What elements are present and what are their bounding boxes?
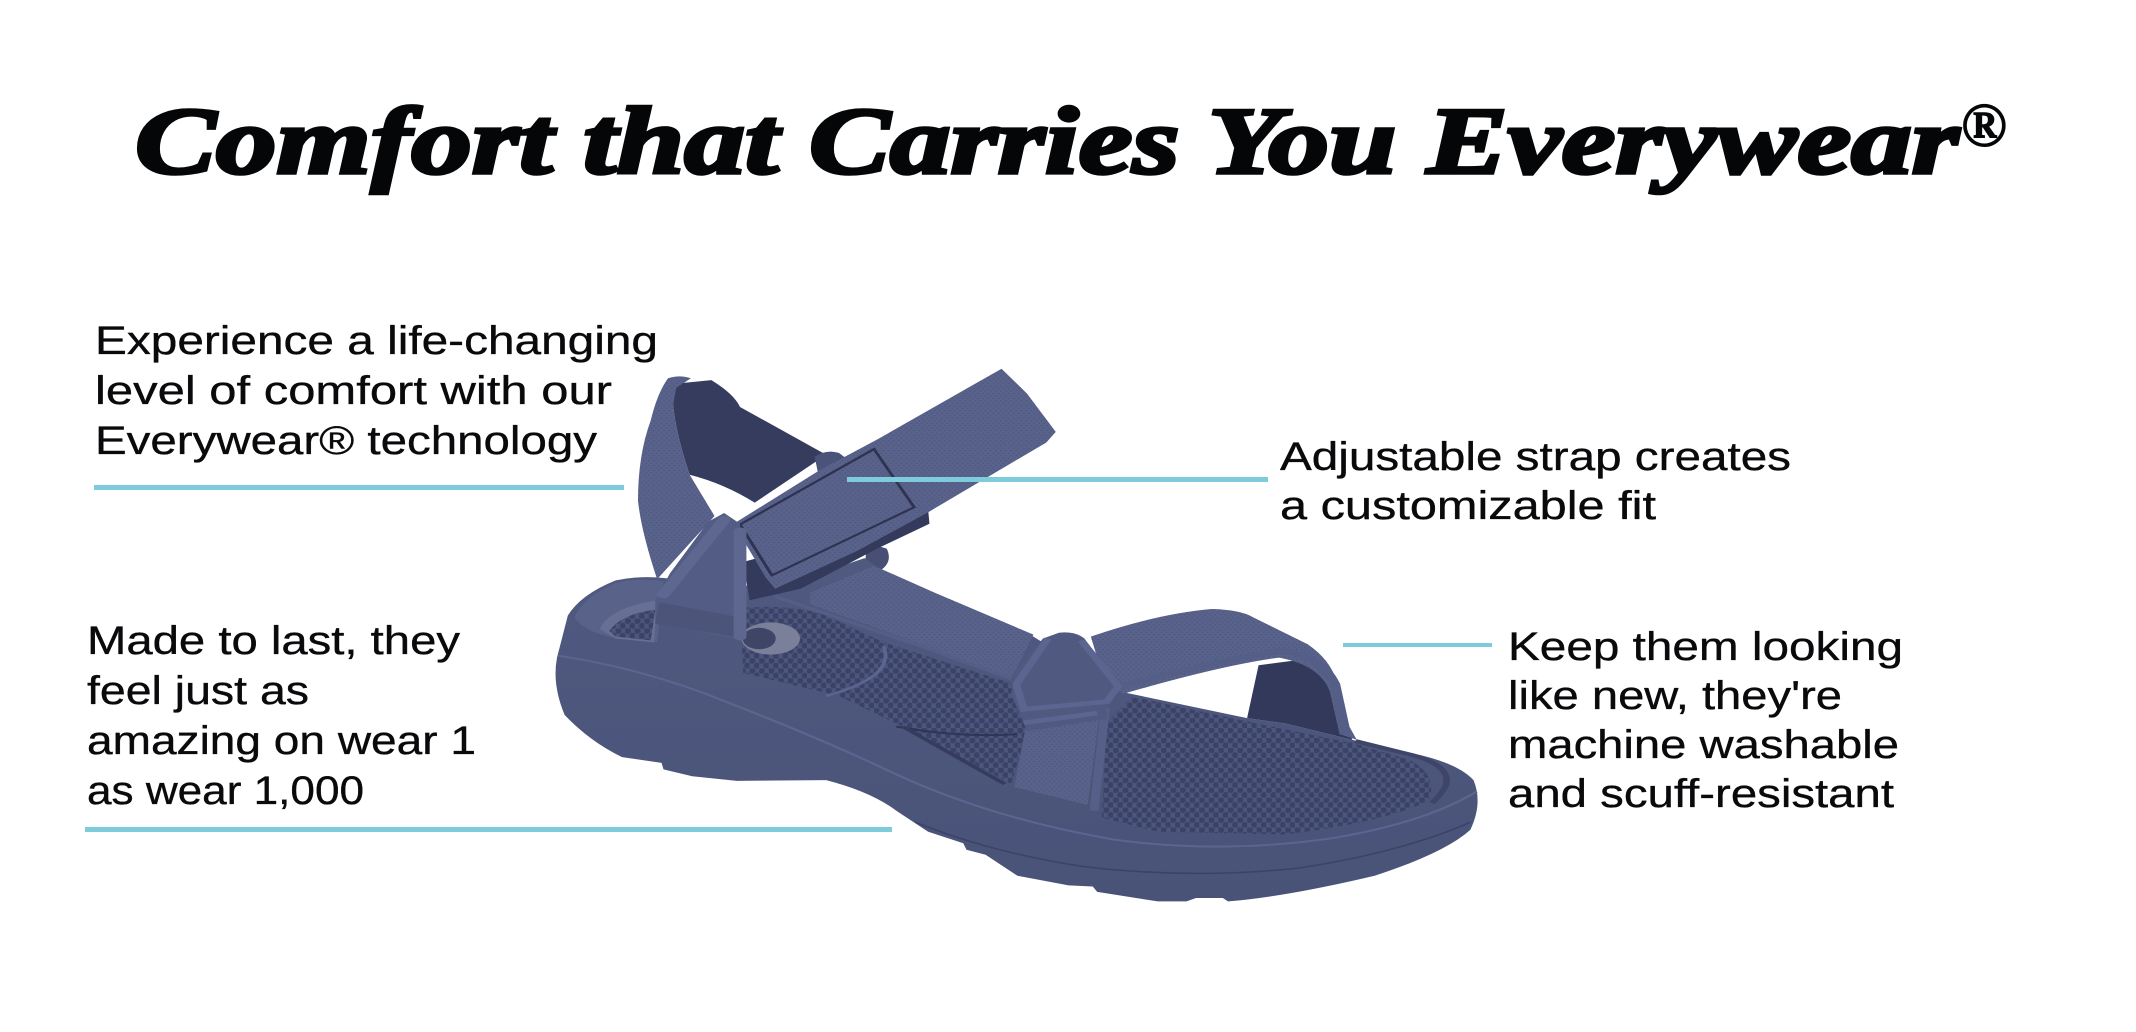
text: made to last: feel just as [87,669,309,713]
text: machine washable: and scuff-resistant [1508,772,1894,816]
text: machine washable: machine washable [1508,723,1899,767]
rear connector base [655,602,734,637]
text: adjustable strap [1280,435,1791,528]
text: Everywear technology: level of comfort with our [95,369,612,413]
front loop behind strap [864,543,889,570]
text: Everywear technology [95,319,658,463]
text: adjustable strap: Adjustable strap creates [1280,435,1791,479]
top strap [734,369,1056,589]
text: Everywear technology: Experience a life-changing [95,319,658,363]
center connector [1011,632,1120,731]
rear strap loop behind buckle [815,452,852,482]
front strap [1091,609,1357,740]
velcro patch [740,449,914,575]
text: Everywear technology: Everywear® technology [95,419,597,463]
callout line: adjustable strap [847,477,1268,482]
rear connector [655,513,740,639]
vertical toe strap edge [1094,707,1106,811]
text: machine washable: like new, they're [1508,674,1842,718]
center connector ridges [1016,639,1118,723]
heel cup [574,580,664,642]
text: machine washable [1508,625,1903,816]
illustration: navy sandal [556,369,1478,901]
velcro underside [743,510,929,600]
rear connector ridges [664,520,740,637]
midsole lower groove [915,822,1470,873]
vertical toe strap [1014,717,1099,805]
heel strap [638,376,715,579]
callout line: washable [1343,643,1492,647]
text: made to last [87,619,476,813]
instep strap [810,566,1033,679]
heel footbed [600,600,657,642]
rear footbed [740,607,1027,784]
sole and midsole body [556,558,1478,901]
text: machine washable: Keep them looking [1508,625,1903,669]
text: adjustable strap: a customizable fit [1280,484,1656,528]
logo disc [741,622,800,655]
arch contour [826,646,886,696]
forefoot footbed [1102,697,1431,834]
midsole highlight line [558,656,1477,847]
footbed rim [1356,741,1447,803]
text: made to last: amazing on wear 1 [87,719,476,763]
footbed outer edge [903,727,1005,784]
text: made to last: Made to last, they [87,619,460,663]
instep strap edge [775,596,1011,679]
callout line: durability [85,827,892,832]
front strap edge [1120,651,1346,734]
callout line: comfort [94,485,624,490]
text: made to last: as wear 1,000 [87,769,364,813]
front strap inner shadow [1247,658,1352,740]
title: ® [1961,92,2007,160]
title: Comfort that Carries You Everywear [135,88,1960,194]
heel strap inner lining [672,380,826,503]
